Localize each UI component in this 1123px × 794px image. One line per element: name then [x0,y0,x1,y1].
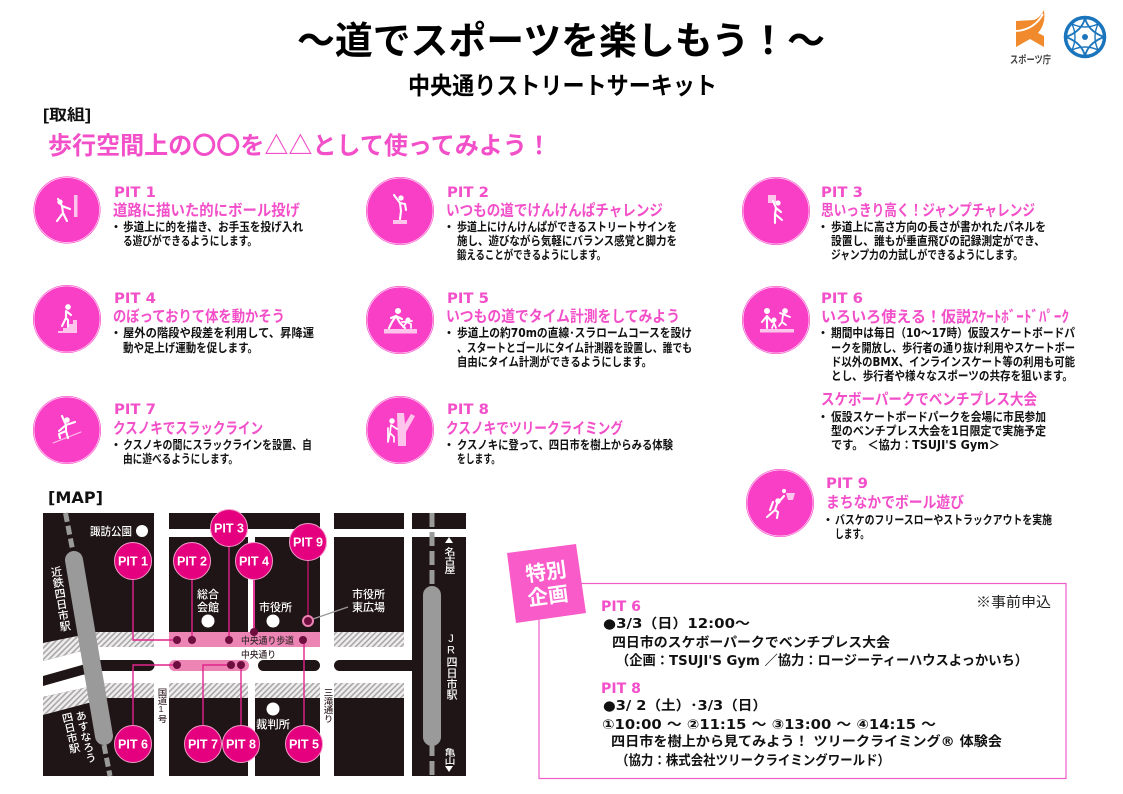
icon: jump [742,177,810,245]
description: ークを開放し、歩行者の通り抜け利用やスケートボー [831,340,1075,355]
map: PIT markers: PIT 5 [289,736,319,752]
description: をします。 [457,452,500,466]
description: 設置し、誰もが垂直飛びの記録測定ができ、 [831,233,1045,248]
description: 、スタートとゴールにタイム計測器を設置し、誰でも [457,340,692,355]
map: place labels: 名古屋 [443,546,456,575]
event: PIT 6 bench press: （企画：TSUJI'S Gym ／協力：ロージーティーハウスよっかいち） [616,652,1028,669]
heading: 思いっきり高く！ジャンプチャレンジ [821,202,1035,220]
description: バスケのフリースローやストラックアウトを実施 [835,512,1052,527]
description: ・ [110,326,122,340]
map: leader lines [133,528,348,744]
heading: まちなかでボール遊び [826,492,964,512]
description: ド以外のBMX、インラインスケート等の利用も可能 [831,354,1075,369]
panel: PIT 2 [366,177,677,262]
event: PIT 8 tree climbing: ●3/ 2（土）･3/3（日） [603,698,767,714]
heading: 道路に描いた的にボール投げ [113,200,300,220]
description: ・ [443,326,455,340]
description [443,437,673,466]
event: PIT 8 tree climbing [601,681,1003,769]
logo: Japan Sports Agency [1010,10,1051,66]
panel: PIT 8 [366,396,673,466]
map: PIT markers: PIT 8 [226,736,256,752]
panel: PIT 3 [742,177,1046,262]
heading: いつもの道でけんけんぱチャレンジ [446,202,663,220]
description [110,437,312,466]
description [817,325,1075,383]
map: place labels: 近鉄四日市駅 [49,564,72,633]
map: PIT markers: PIT 7 [188,736,218,752]
description: 歩道上に的を描き、お手玉を投げ入れ [123,219,303,234]
description: ・ [817,326,829,340]
map: PIT markers: PIT 9 [293,534,323,550]
map: city blocks [43,513,466,776]
event: PIT 8 tree climbing: PIT 8 [601,681,641,697]
description: ・ [817,220,829,234]
description: bench press: 仮設スケートボードパークを会場に市民参加 [831,409,1046,424]
main heading: 歩行空間上の〇〇を△△として使ってみよう！ [48,132,551,160]
description: します。 [835,527,869,541]
map: PIT markers [114,510,326,762]
event: PIT 6 bench press: PIT 6 [601,599,641,615]
map: place labels: 国道1号 [156,688,167,724]
map: PIT markers: PIT 2 [177,554,207,568]
description: 動や足上げ運動を促します。 [123,340,258,355]
description: ・ [822,513,834,527]
heading: のぼっておりて体を動かそう [113,308,285,326]
description: bench press: ・ [817,410,829,424]
label: PIT 2 [447,185,489,201]
map: landmark dots [136,525,280,716]
badge: special project: 企画 [526,582,570,611]
description: 期間中は毎日（10～17時）仮設スケートボードパ [831,325,1075,340]
icon: basketball [746,469,814,537]
heading: いろいろ使える！仮説ｽｹｰﾄﾎﾞｰﾄﾞﾊﾟｰｸ [821,307,1069,326]
description: クスノキに登って、四日市を樹上からみる体験 [457,437,673,452]
description: ・ [443,438,455,452]
panel: PIT 4 [33,285,314,355]
description: る遊びができるようにします。 [123,233,257,248]
map: place labels: 裁判所 [256,717,290,731]
description: とし、歩行者や様々なスポーツの共存を狙います。 [831,368,1073,383]
label: PIT 9 [826,476,868,492]
description: bench press [817,409,1046,452]
description: クスノキの間にスラックラインを設置、自 [123,437,312,452]
map: place labels: 総合 [197,587,219,601]
box outline [539,584,1066,778]
map: place labels: 三滝通り [322,688,333,723]
map: place labels: 市役所 [352,587,385,601]
description: ・ [110,438,122,452]
label: PIT 8 [447,402,489,418]
heading: いつもの道でタイム計測をしてみよう [446,308,680,326]
icon: tree climbing [366,396,434,464]
icon: stairs [33,285,101,353]
logo: city emblem [1066,18,1104,56]
map [43,510,466,776]
event: PIT 8 tree climbing: 四日市を樹上から見てみよう！ ツリークライミング® 体験会 [611,733,1003,750]
description [822,512,1052,541]
note: advance registration: ※事前申込 [976,594,1051,610]
label: PIT 4 [114,291,156,307]
map: road bands [43,632,404,715]
icon: running [366,286,434,354]
map: place labels: 中央通り [241,649,276,661]
label: PIT 5 [447,291,489,307]
event: PIT 6 bench press: ●3/3（日）12:00～ [603,616,750,632]
section label: initiatives: [取組] [43,106,91,124]
description: 歩道上にけんけんぱができるストリートサインを [457,219,677,234]
description: bench press: 型のベンチプレス大会を1日限定で実施予定 [831,423,1046,438]
title: 〜道でスポーツを楽しもう！〜 [297,21,825,63]
badge: special project [507,544,586,623]
description: 施し、遊びながら気軽にバランス感覚と脚力を [457,233,677,248]
map: place labels: JR四日市駅 [445,633,458,701]
event: PIT 6 bench press: 四日市のスケボーパークでベンチプレス大会 [612,634,891,651]
icon: balance [366,177,434,245]
description [443,219,677,262]
panel: PIT 9 [746,469,1052,541]
map: place labels [49,524,457,772]
icon: skate park [742,286,810,354]
description: ジャンプ力の力試しができるようにします。 [831,247,1023,262]
sub heading: bench press: スケボーパークでベンチプレス大会 [821,390,1037,408]
panel: PIT 7 [33,396,312,466]
map: PIT markers: PIT 3 [214,520,244,536]
panel: PIT 5 [366,286,692,369]
heading: クスノキでツリークライミング [446,418,623,438]
label: PIT 1 [114,185,156,201]
description: 屋外の階段や段差を利用して、昇降運 [123,325,314,340]
description: ・ [110,220,122,234]
description: 歩道上に高さ方向の長さが書かれたパネルを [831,219,1046,234]
map: place labels: あすなろう [73,709,97,765]
description: 鍛えることができるようにします。 [457,247,606,262]
event: PIT 8 tree climbing: ①10:00 ～ ②11:15 ～ ③13:00 ～ ④14:15 ～ [602,717,936,733]
label: PIT 7 [114,402,156,418]
map: PIT markers: PIT 4 [239,554,270,568]
map: place labels: 市役所 [259,600,292,614]
map: place labels: 東広場 [352,600,385,614]
description [110,219,303,248]
icon: ball throw [34,176,100,244]
description: bench press: です。 ＜協力：TSUJI'S Gym＞ [831,437,1000,452]
map: PIT markers: PIT 6 [118,736,148,752]
map: railways [66,513,432,776]
event: PIT 6 bench press [601,599,1028,669]
panel: special events box [507,544,1066,778]
event: PIT 8 tree climbing: （協力：株式会社ツリークライミングワールド） [616,752,890,769]
logo: Japan Sports Agency: スポーツ庁 [1010,54,1051,66]
heading: クスノキでスラックライン [113,420,263,438]
map: place labels: 中央通り歩道 [241,635,294,647]
map: place labels: 諏訪公園 [90,524,132,538]
description: ・ [443,220,455,234]
description [110,325,314,355]
panel: PIT 1 [34,176,303,248]
panel: PIT 6 [742,286,1075,452]
description: 由に遊べるようにします。 [123,451,238,466]
map: place labels: 会館 [197,600,219,614]
map: location dots [173,616,313,669]
description [817,219,1046,262]
label: PIT 3 [821,185,863,201]
description [443,325,692,369]
description: 歩道上の約70mの直線･スラロームコースを設け [457,325,692,340]
section label: map: [MAP] [48,488,103,507]
icon: slackline [33,396,101,464]
map: place labels: 四日市駅 [59,711,81,755]
map: place labels: 亀山 [443,747,456,765]
map: PIT markers: PIT 1 [118,554,148,568]
description: 自由にタイム計測ができるようにします。 [457,354,652,369]
badge: special project: 特別 [524,558,568,587]
subtitle: 中央通りストリートサーキット [408,73,717,100]
label: PIT 6 [821,291,863,307]
